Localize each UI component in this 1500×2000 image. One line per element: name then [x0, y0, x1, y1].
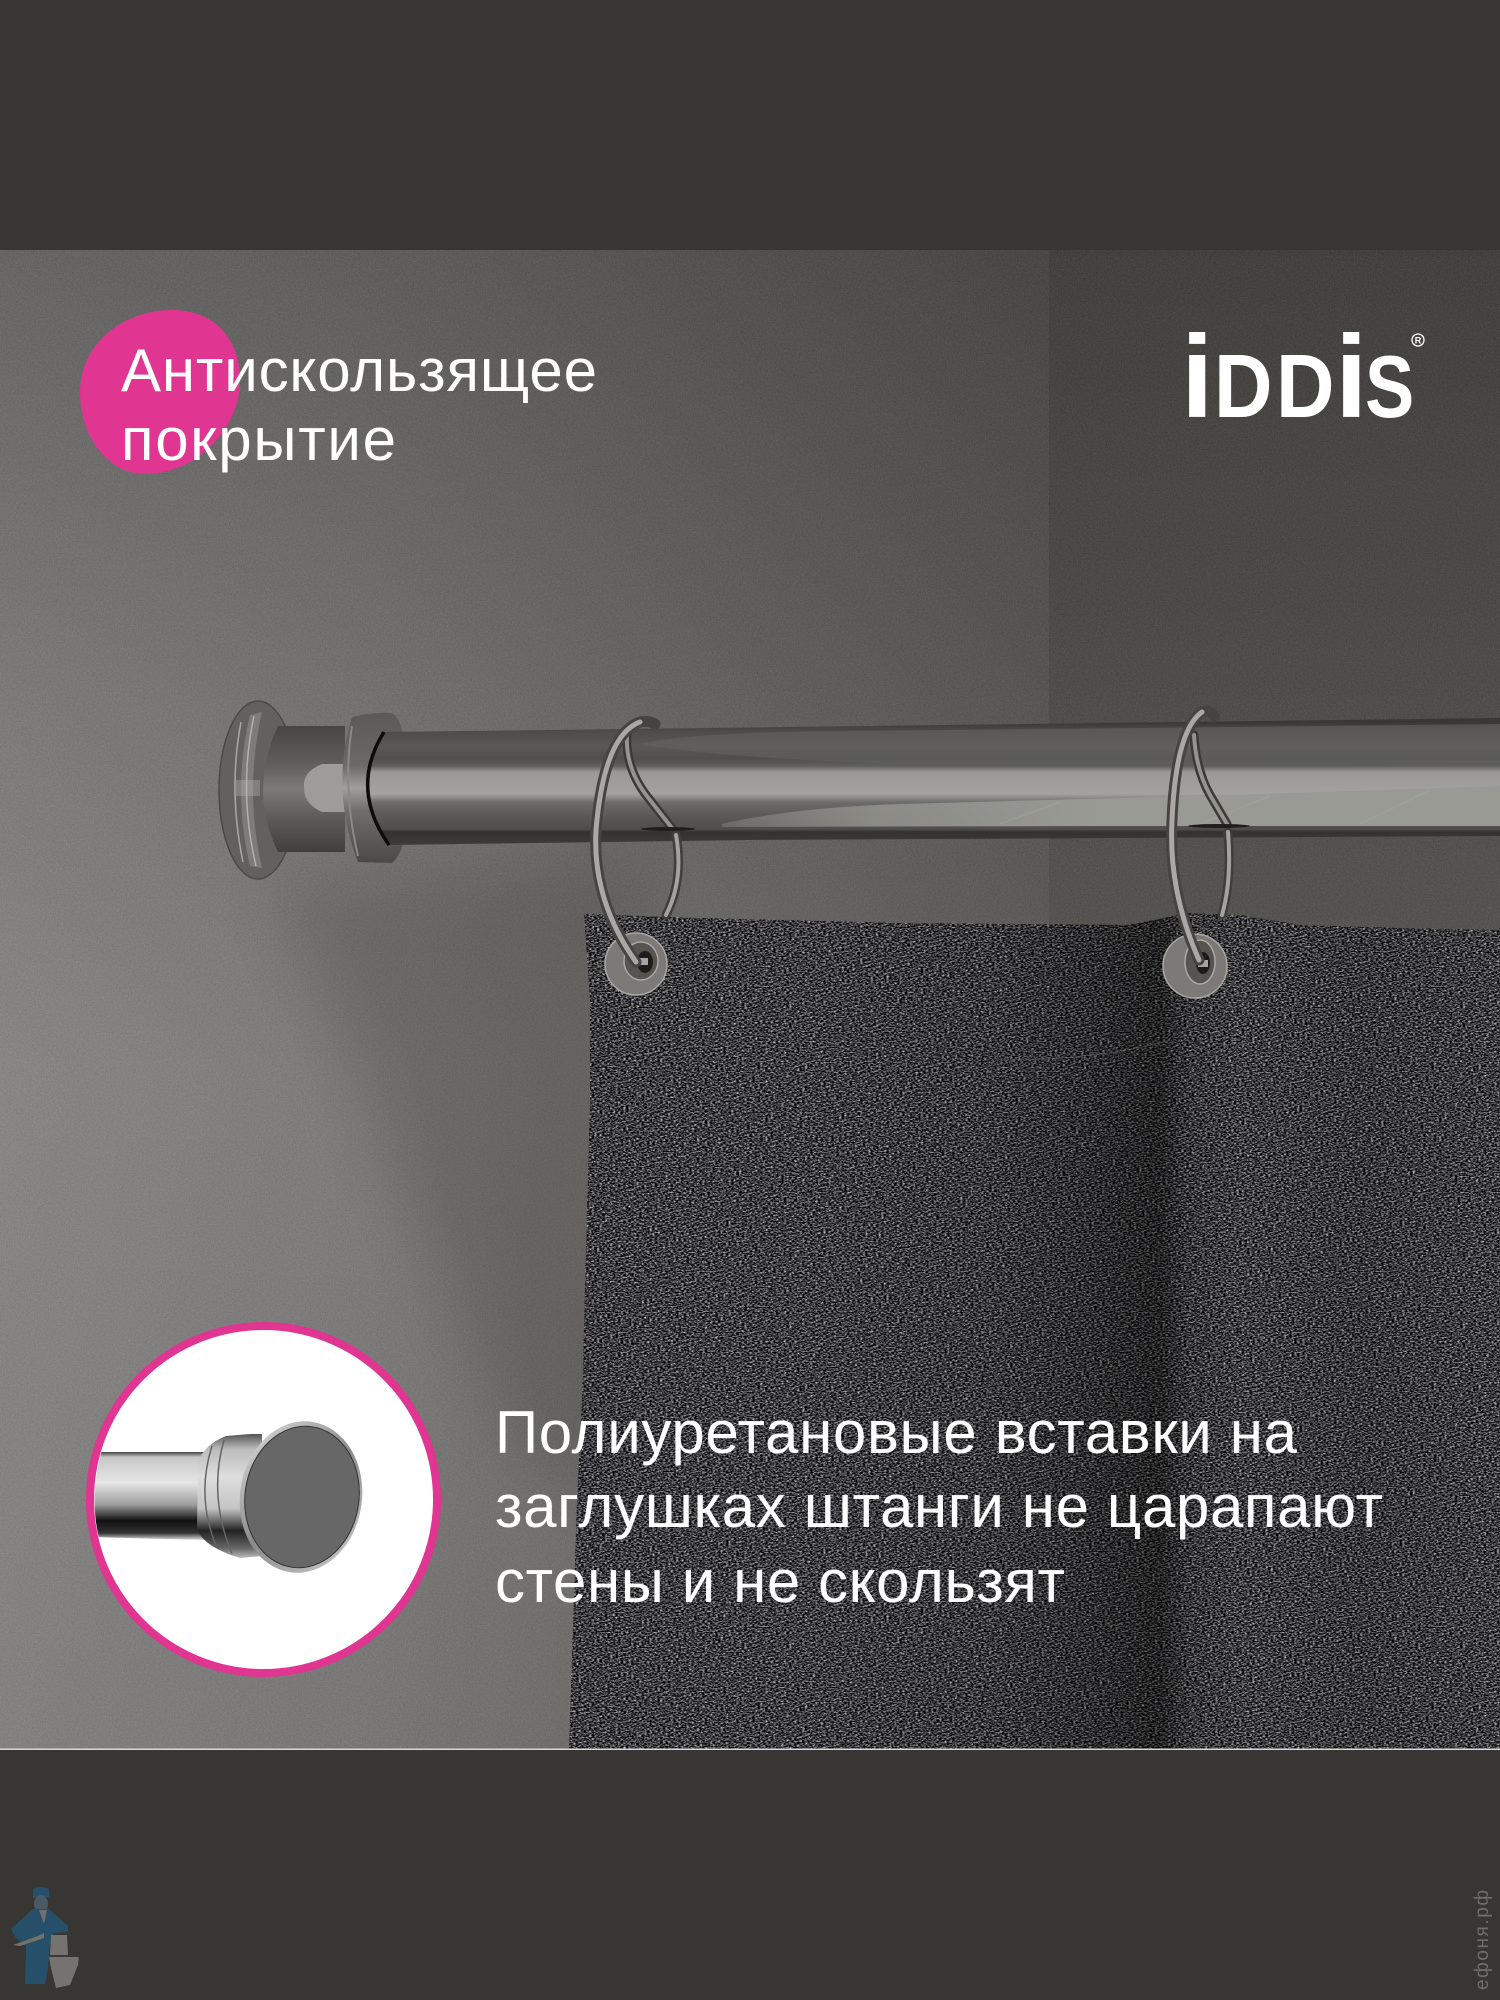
rod body near wall — [263, 726, 345, 852]
right curtain ring — [1172, 711, 1250, 960]
logo: IDDIS: D — [1214, 336, 1272, 437]
registered mark — [1412, 334, 1424, 346]
logo: IDDIS — [1181, 311, 1424, 442]
heading: anti-slip coating: покрытие — [121, 406, 396, 473]
description text: Полиуретановые вставки на — [495, 1399, 1298, 1466]
curtain — [560, 905, 1500, 1755]
left wall — [0, 250, 1049, 1749]
registered mark: R — [1415, 336, 1422, 346]
lower reflection — [722, 786, 1500, 827]
upper reflection — [640, 724, 1500, 764]
logo: IDDIS: i — [1181, 311, 1214, 442]
heading: anti-slip coating — [121, 337, 597, 473]
description text — [495, 1399, 1383, 1615]
rod collar — [342, 713, 404, 863]
logo: IDDIS: i — [1335, 311, 1368, 442]
description text: стены и не скользят — [495, 1548, 1065, 1615]
circular callout: rod end cap detail — [90, 1326, 437, 1673]
heading: anti-slip coating: Антискользящее — [121, 337, 597, 404]
description text: заглушках штанги не царапают — [495, 1473, 1383, 1540]
left eyelet — [605, 933, 667, 995]
photo panel: wall, rod and curtain — [0, 250, 1500, 1755]
wall grain — [0, 250, 1500, 1749]
end-cap illustration — [90, 1413, 372, 1581]
main rod tube — [368, 718, 1500, 845]
rod shadow on wall — [294, 869, 632, 1472]
rod wall flange — [218, 700, 287, 880]
right eyelet — [1163, 934, 1227, 998]
icon: plumber with toilet — [11, 1887, 79, 1988]
logo: IDDIS: S — [1365, 338, 1414, 436]
watermark: ефоня.рф — [1472, 1890, 1493, 1990]
pink blob behind heading — [80, 310, 240, 474]
bottom edge line of photo — [0, 1748, 1500, 1750]
logo: IDDIS: D — [1276, 336, 1334, 437]
left curtain ring — [596, 721, 695, 962]
right wall — [1049, 250, 1500, 950]
